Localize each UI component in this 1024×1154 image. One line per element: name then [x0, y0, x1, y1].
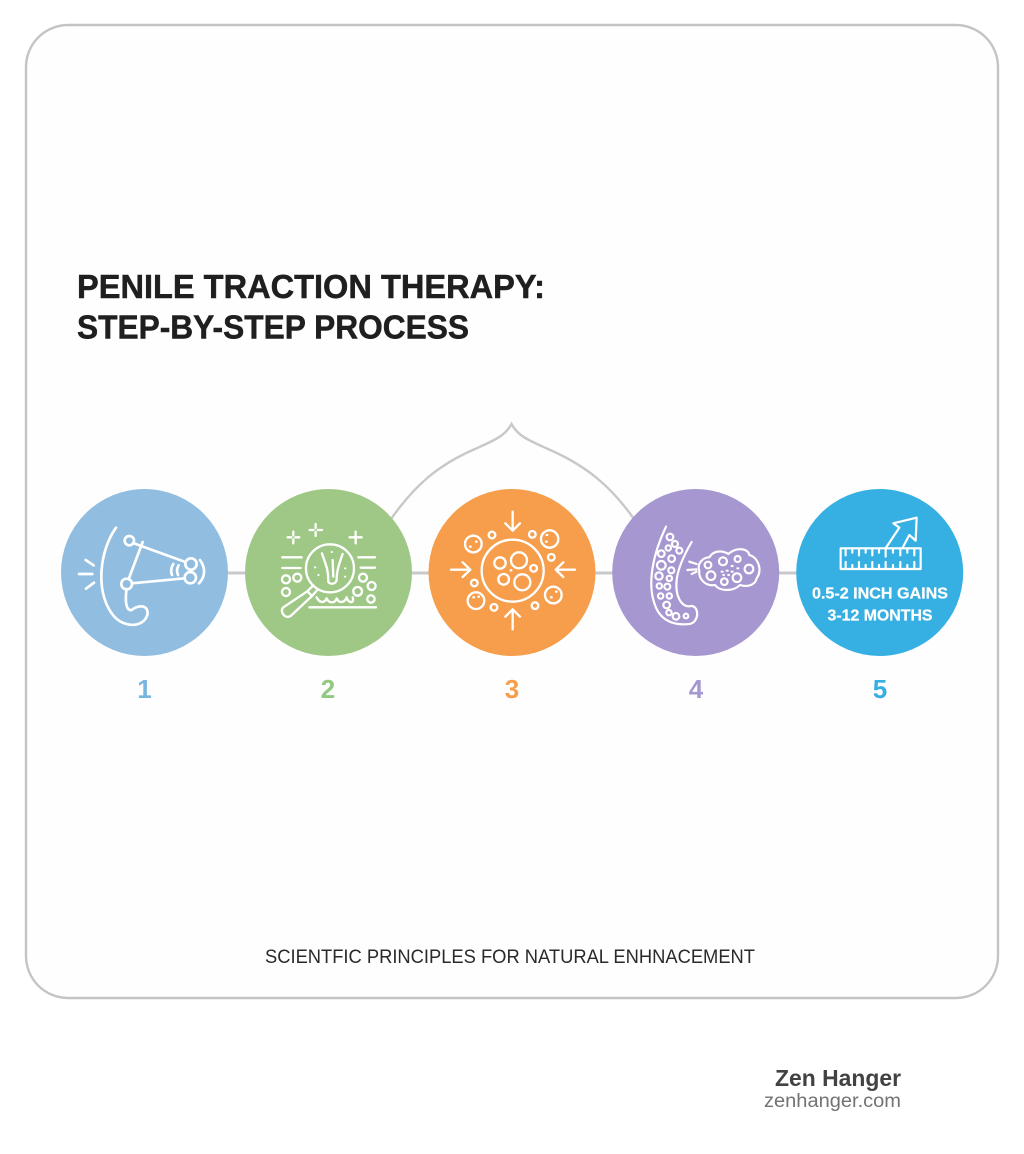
step 5 circle with ruler icon and result text	[796, 489, 963, 656]
icon: ruler with up arrow	[841, 518, 921, 569]
arch connector above step 3	[391, 424, 634, 519]
title	[77, 268, 545, 346]
icon: magnifying glass over tissue	[282, 524, 376, 617]
step 1 circle with traction icon	[61, 489, 228, 656]
icon: cell under pressure	[451, 512, 575, 629]
subtitle: SCIENTFIC PRINCIPLES FOR NATURAL ENHNACEMENT	[265, 946, 755, 968]
step number 4: 4	[689, 674, 704, 704]
title: PENILE TRACTION THERAPY:	[77, 268, 545, 305]
step number 3: 3	[505, 674, 519, 704]
step number 5: 5	[873, 674, 887, 704]
result text: 0.5-2 INCH GAINS	[812, 586, 948, 602]
brand name: Zen Hanger	[775, 1065, 901, 1091]
title: STEP-BY-STEP PROCESS	[77, 308, 469, 346]
result text	[812, 586, 948, 624]
step number 2: 2	[321, 674, 335, 704]
brand url: zenhanger.com	[764, 1091, 901, 1112]
step 3 circle with cell icon	[428, 489, 596, 656]
icon: tissue and cell cluster	[651, 527, 759, 624]
step number 1: 1	[137, 674, 152, 704]
result text: 3-12 MONTHS	[828, 608, 933, 624]
step 2 circle with magnifier icon	[245, 489, 412, 656]
icon: traction device	[79, 528, 204, 625]
step 4 circle with tissue icon	[612, 489, 779, 656]
connector line between circles	[144, 572, 880, 574]
